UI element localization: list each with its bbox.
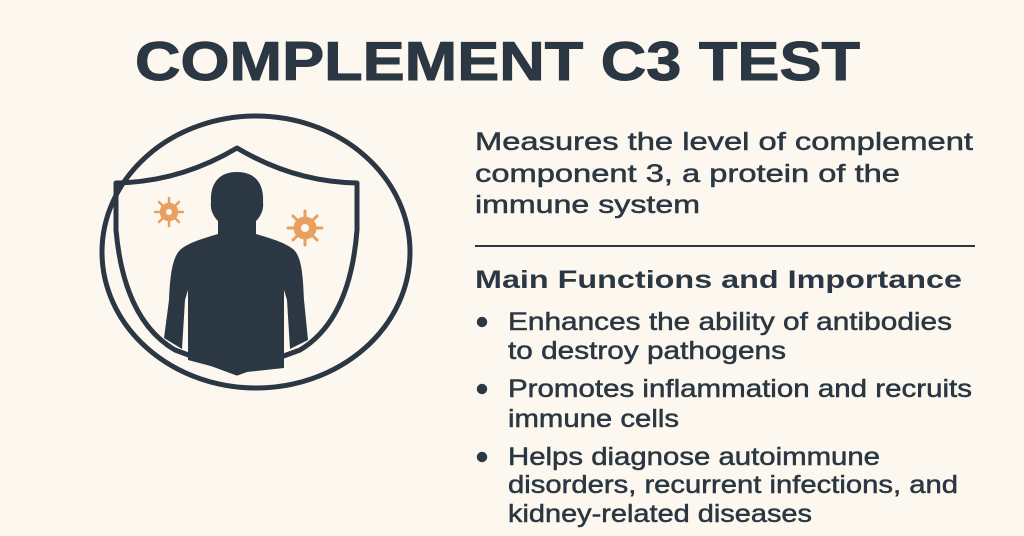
text block: description — [475, 128, 973, 219]
icon: virus right — [288, 211, 322, 245]
bullet list — [477, 308, 972, 528]
bullet list: Enhances the ability of antibodies — [508, 308, 952, 336]
bullet list: disorders, recurrent infections, and — [508, 471, 958, 499]
bullet list: to destroy pathogens — [508, 337, 786, 365]
bullet list: kidney-related diseases — [508, 500, 812, 528]
heading: main functions: Main Functions and Importance — [475, 266, 962, 294]
bullet list: Helps diagnose autoimmune — [508, 443, 880, 471]
ellipse frame — [102, 116, 410, 388]
text block: description: Measures the level of complement — [475, 128, 973, 156]
text block: description: immune system — [475, 191, 700, 219]
shield outline — [116, 148, 357, 373]
icon: virus left — [155, 198, 183, 226]
bullet list: immune cells — [508, 405, 679, 433]
title: COMPLEMENT C3 TEST — [135, 30, 860, 92]
text block: description: component 3, a protein of the — [475, 160, 900, 188]
bullet list: Promotes inflammation and recruits — [508, 375, 972, 403]
icon: shield with person — [102, 116, 410, 388]
person silhouette — [164, 172, 308, 373]
